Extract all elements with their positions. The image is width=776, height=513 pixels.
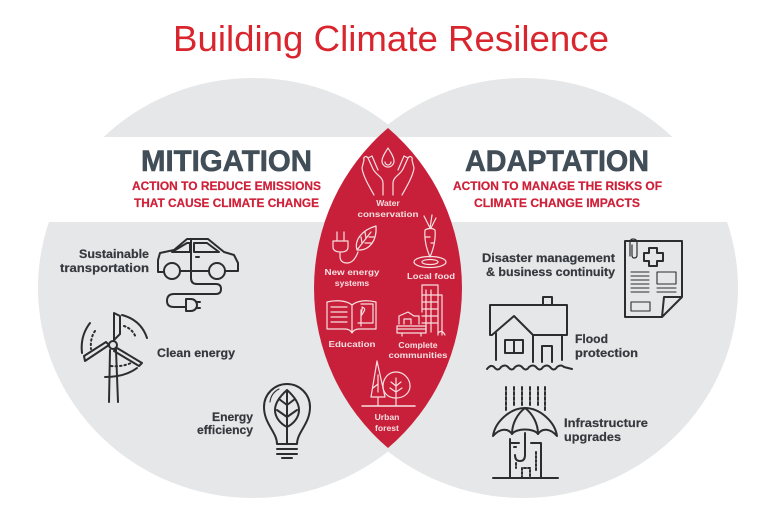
icon: medical document (625, 239, 682, 317)
label: infrastructure upgrades (564, 418, 648, 444)
label: new energy systems: New energy (324, 267, 380, 277)
label: sustainable transportation: transportation (60, 263, 149, 275)
label: infrastructure upgrades: upgrades (564, 432, 621, 444)
icon: plug and leaf (333, 226, 376, 263)
icon: city buildings and bus (397, 285, 445, 336)
panel: mitigation heading: THAT CAUSE CLIMATE CHANGE (134, 198, 319, 210)
label: flood protection: Flood (575, 334, 608, 346)
icon: wind turbine (82, 313, 147, 402)
label: new energy systems: systems (335, 278, 369, 288)
panel: overlap items (324, 148, 455, 433)
panel: adaptation items (482, 239, 682, 478)
panel: adaptation heading (453, 145, 662, 210)
label: water conservation: conservation (358, 209, 418, 219)
label: disaster management: Disaster management (482, 253, 615, 265)
label: complete communities: communities (388, 350, 448, 360)
label: disaster management: & business continuity (486, 267, 616, 279)
icon: electric car (158, 239, 238, 311)
icon: hands and water drop (362, 148, 414, 195)
label: water conservation (358, 198, 418, 219)
icon: umbrella over building (493, 387, 558, 478)
icon: urban forest trees (362, 361, 415, 406)
panel: mitigation heading (132, 145, 321, 210)
icon: open book with leaf (327, 301, 376, 333)
label: local food: Local food (407, 271, 455, 281)
panel: mitigation heading: ACTION TO REDUCE EMISSIONS (132, 181, 321, 193)
label: sustainable transportation: Sustainable (79, 249, 149, 261)
label: infrastructure upgrades: Infrastructure (564, 418, 648, 430)
panel: adaptation heading: ACTION TO MANAGE THE RISKS OF (453, 181, 662, 193)
icon: light bulb with leaf (264, 384, 310, 458)
label: disaster management (482, 253, 616, 279)
icon: carrot (414, 215, 446, 268)
label: urban forest (375, 412, 399, 433)
label: education: Education (328, 339, 376, 349)
panel: adaptation heading: CLIMATE CHANGE IMPACTS (474, 198, 640, 210)
label: sustainable transportation (60, 249, 149, 275)
label: clean energy: Clean energy (157, 348, 236, 360)
label: complete communities (388, 340, 448, 360)
label: flood protection: protection (575, 348, 638, 360)
label: urban forest: Urban (375, 412, 399, 422)
centre overlap lens (314, 128, 462, 448)
label: complete communities: Complete (398, 340, 438, 350)
label: energy efficiency (197, 412, 254, 437)
label: energy efficiency: efficiency (197, 425, 254, 437)
label: flood protection (575, 334, 638, 360)
label: water conservation: Water (376, 198, 400, 208)
label: urban forest: forest (375, 423, 399, 433)
panel: mitigation items (60, 239, 310, 458)
label: energy efficiency: Energy (212, 412, 254, 424)
title: Building Climate Resilence (173, 18, 609, 59)
icon: flooded house (487, 297, 572, 370)
panel: mitigation heading: MITIGATION (141, 145, 312, 178)
panel: adaptation heading: ADAPTATION (465, 145, 649, 178)
label: new energy systems (324, 267, 380, 288)
